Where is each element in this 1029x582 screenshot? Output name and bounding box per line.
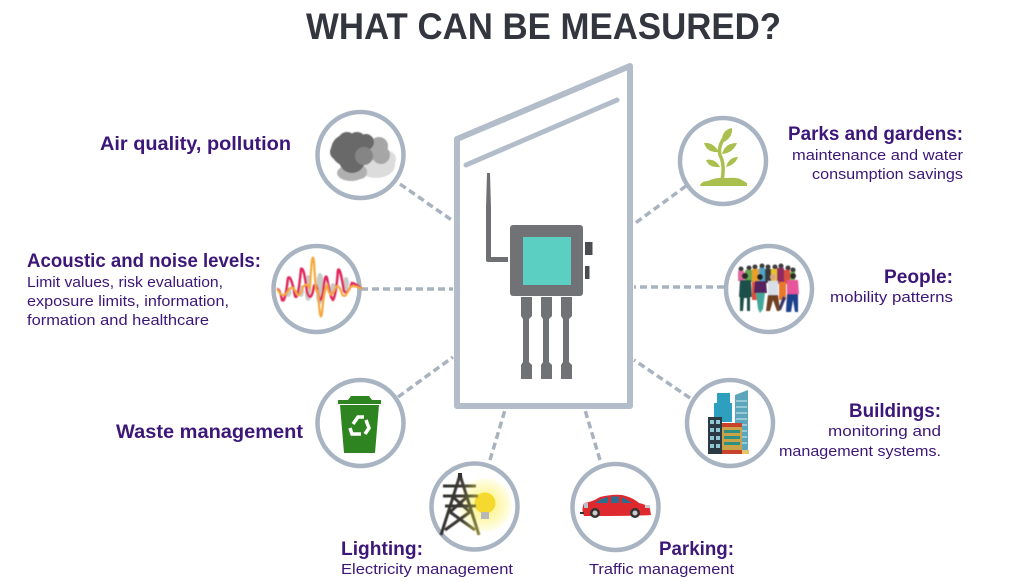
device body (510, 225, 583, 296)
label: acoustic and noise: Acoustic and noise levels: (27, 251, 261, 272)
label: buildings (779, 401, 941, 460)
connector: waste (398, 357, 453, 397)
label: parks and gardens: consumption savings (812, 166, 963, 183)
device buttons (585, 242, 592, 279)
sensor cables (521, 297, 572, 379)
connector: air quality (400, 184, 453, 221)
label: lighting: Electricity management (341, 561, 514, 578)
sensor device (486, 173, 592, 379)
label: buildings: management systems. (779, 443, 941, 460)
label: parking (589, 539, 735, 578)
label: parks and gardens: maintenance and water (792, 147, 963, 164)
label: parks and gardens: Parks and gardens: (788, 124, 963, 145)
building frame (457, 66, 630, 406)
label: lighting: Lighting: (341, 539, 423, 560)
circle icon: sound wave (274, 246, 362, 332)
title: WHAT CAN BE MEASURED? (306, 6, 781, 47)
circle icon: crowd (726, 246, 812, 332)
label: waste management: Waste management (116, 422, 304, 443)
connector: buildings (634, 360, 690, 398)
label: parking: Parking: (659, 539, 734, 560)
connector: parks (634, 186, 686, 224)
circle icon: buildings (687, 380, 773, 466)
circle icon: plant (680, 118, 766, 204)
connector: noise (361, 287, 453, 291)
label: acoustic and noise: formation and healthcare (27, 312, 209, 329)
label: buildings: monitoring and (828, 423, 941, 440)
device screen (523, 237, 571, 285)
label: acoustic and noise: exposure limits, information, (27, 293, 229, 310)
label: acoustic and noise (27, 251, 261, 329)
circle icon: smoke (318, 112, 404, 198)
back row (738, 264, 796, 310)
connector: parking (585, 410, 600, 460)
label: air quality: Air quality, pollution (100, 134, 291, 155)
label: buildings: Buildings: (849, 401, 941, 422)
label: parking: Traffic management (589, 561, 735, 578)
connector: lighting (490, 410, 505, 460)
label: lighting (341, 539, 514, 578)
circle icon: pylon and bulb (432, 464, 518, 550)
label: people: People: (884, 267, 953, 288)
front row (739, 273, 799, 313)
label: parks and gardens (788, 124, 963, 183)
label: acoustic and noise: Limit values, risk evaluation, (27, 274, 223, 291)
label: people: mobility patterns (830, 289, 953, 306)
antenna (486, 173, 508, 262)
circle icon: car (572, 464, 658, 550)
connector: people (634, 285, 724, 289)
circle icon: recycling bin (318, 380, 404, 466)
label: people (830, 267, 953, 306)
